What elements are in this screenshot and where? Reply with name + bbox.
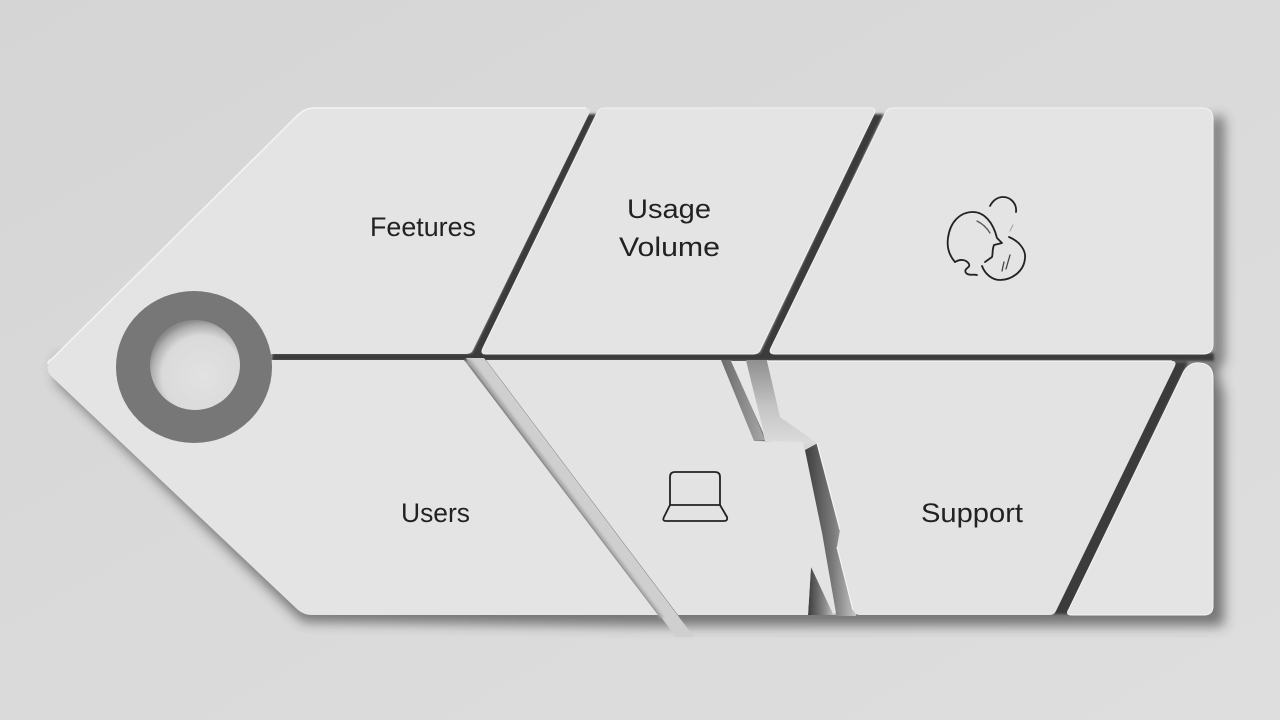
panel: Support segment [767,361,1176,615]
heading: Feetures: Feetures [370,212,476,242]
panel: arrow head top segment, Feetures [48,108,590,377]
panel: top right segment with head icon [770,108,1213,354]
icon: two overlapping heads [948,197,1025,280]
sliver fragment between lower segments [731,361,765,437]
heading: Support: Support [921,498,1024,528]
light floor behind the broken lower segment [715,361,856,615]
icon: laptop [663,472,727,521]
icon: ring marker [116,291,272,443]
heading: Usage Volume: Usage [627,194,711,224]
panel: lower right triangular segment [1068,363,1213,615]
panel: lower middle segment with laptop icon [486,360,836,615]
panel: arrow head bottom segment, Users [52,350,658,615]
heading: Usage Volume [619,194,720,262]
heading: Usage Volume: Volume [619,232,720,262]
panel: Usage Volume segment [482,108,875,354]
heading: Users: Users [401,498,470,528]
